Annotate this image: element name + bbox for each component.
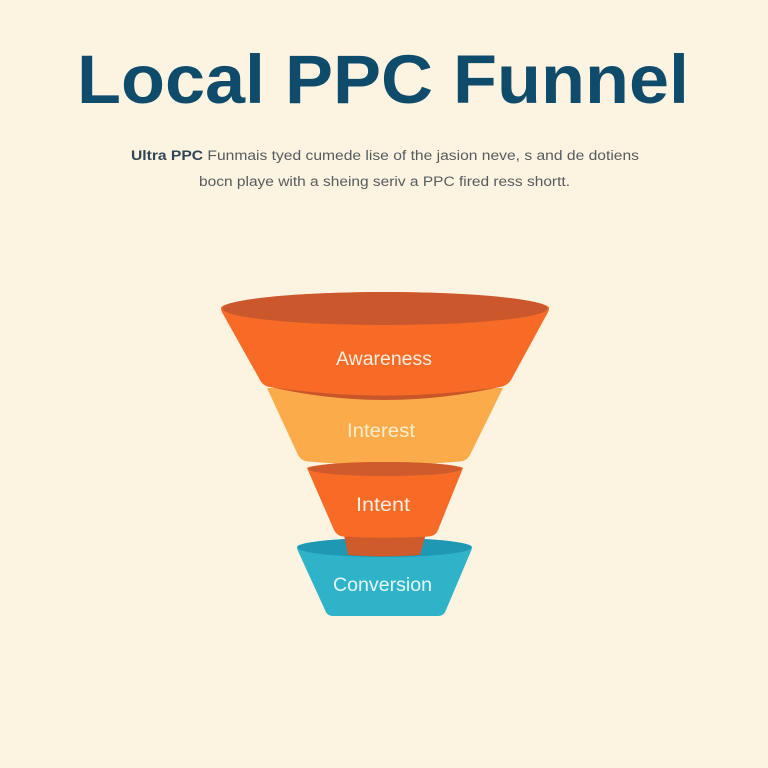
subtitle text block: bocn playe with a sheing seriv a PPC fired ress shortt. [199, 174, 570, 189]
funnel stage: Interest [267, 388, 503, 465]
funnel stage: Conversion [297, 530, 472, 616]
title: Local PPC Funnel [77, 41, 689, 118]
funnel diagram [221, 292, 549, 616]
subtitle text block: Ultra PPC Funmais tyed cumede lise of the jasion neve, s and de dotiens [131, 148, 639, 163]
funnel stage: Conversion: Conversion [333, 575, 432, 596]
funnel stage: Interest: Interest [347, 421, 416, 442]
funnel stage: Intent: Intent [356, 495, 411, 516]
funnel stage: Awareness: Awareness [336, 349, 432, 370]
funnel stage: Intent [307, 462, 463, 538]
funnel stage: Awareness [221, 292, 549, 400]
subtitle text block [131, 148, 639, 189]
